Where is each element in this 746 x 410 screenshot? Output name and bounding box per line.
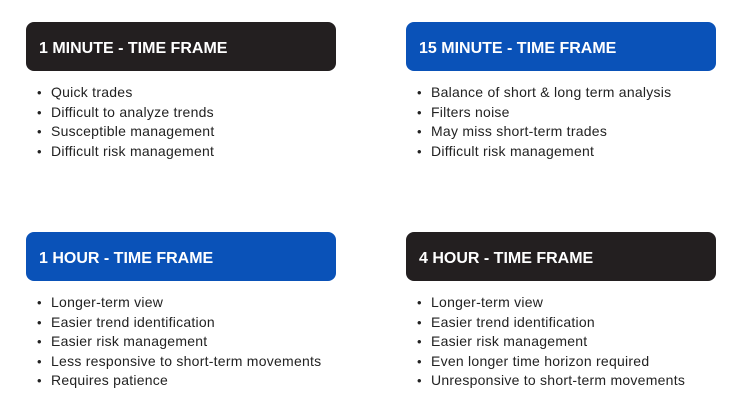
list: 1 minute [38, 84, 214, 159]
heading: 15 minute [406, 22, 716, 71]
list: 4 hour: Easier risk management [431, 333, 587, 349]
panel: 15 minute [406, 22, 716, 159]
list: 4 hour [418, 294, 685, 388]
panel: 1 minute [26, 22, 336, 159]
list: 1 hour: Requires patience [51, 372, 168, 388]
list: 1 hour: Easier trend identification [51, 314, 215, 330]
list: 1 hour [38, 294, 321, 388]
list: 4 hour: Unresponsive to short-term movements [431, 372, 685, 388]
list: 1 minute: Susceptible management [51, 123, 214, 139]
list: 1 minute: Difficult to analyze trends [51, 104, 214, 120]
list: 15 minute [418, 84, 671, 159]
list: 1 minute: Difficult risk management [51, 142, 214, 158]
heading: 1 hour: 1 HOUR - TIME FRAME [39, 250, 213, 267]
list: 4 hour: Easier trend identification [431, 314, 595, 330]
list: 15 minute: Difficult risk management [431, 142, 594, 158]
list: 15 minute: Filters noise [431, 104, 510, 120]
list: 15 minute: Balance of short & long term analysis [431, 84, 671, 100]
list: 4 hour: Longer-term view [431, 294, 543, 310]
heading: 1 hour [26, 232, 336, 281]
list: 1 hour: Less responsive to short-term movements [51, 352, 321, 368]
heading: 1 minute [26, 22, 336, 71]
panel: 1 hour [26, 232, 336, 388]
panel: 4 hour [406, 232, 716, 388]
list: 4 hour: Even longer time horizon required [431, 352, 649, 368]
list: 15 minute: May miss short-term trades [431, 123, 607, 139]
heading: 1 minute: 1 MINUTE - TIME FRAME [39, 40, 227, 57]
heading: 4 hour [406, 232, 716, 281]
heading: 15 minute: 15 MINUTE - TIME FRAME [419, 40, 616, 57]
heading: 4 hour: 4 HOUR - TIME FRAME [419, 250, 593, 267]
list: 1 hour: Longer-term view [51, 294, 163, 310]
list: 1 hour: Easier risk management [51, 333, 207, 349]
list: 1 minute: Quick trades [51, 84, 133, 100]
